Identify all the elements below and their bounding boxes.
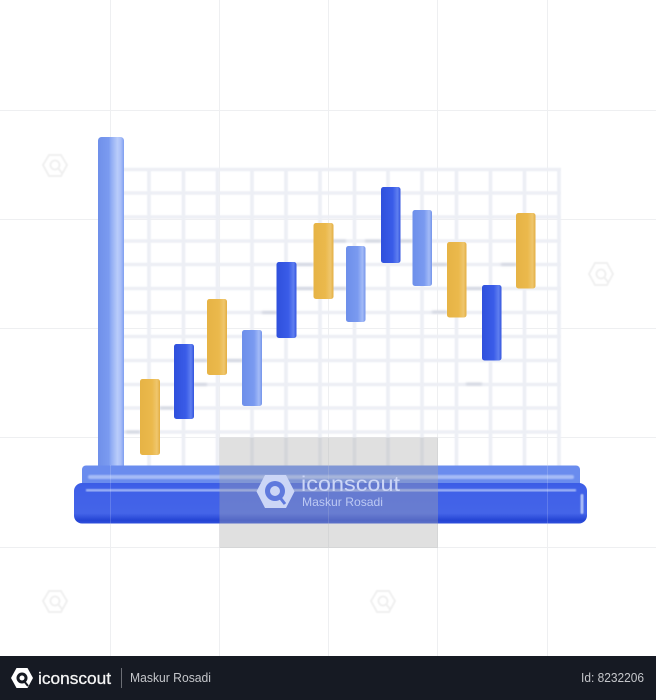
bar 11 dark blue xyxy=(482,285,502,360)
bar shadows on grid xyxy=(126,241,516,432)
horizontal grid lines xyxy=(122,170,561,432)
faint watermark icon bottom center xyxy=(371,591,395,612)
bar 8 dark blue xyxy=(381,187,400,263)
watermark lines over base xyxy=(110,465,548,524)
base upper tier xyxy=(82,466,580,490)
faint watermark icon bottom left xyxy=(43,591,67,612)
footer brand text: iconscout xyxy=(38,669,111,688)
bar 4 light blue xyxy=(242,330,262,406)
base lower tier xyxy=(74,483,587,524)
bar 9 light blue xyxy=(412,210,432,286)
bar 6 gold xyxy=(314,223,334,299)
faint watermark icon right xyxy=(589,263,613,285)
center watermark panel xyxy=(220,438,438,548)
footer id: Id: 8232206 xyxy=(581,671,644,685)
footer bar xyxy=(0,656,656,700)
bar 7 light blue xyxy=(346,246,366,322)
bar 12 gold xyxy=(516,213,536,288)
bar 10 gold xyxy=(447,242,466,318)
vertical axis column xyxy=(98,137,124,472)
bar 5 dark blue xyxy=(276,262,296,338)
candlestick bars xyxy=(140,187,536,455)
faint watermark icon top left xyxy=(43,155,67,176)
bar 2 dark blue xyxy=(174,344,194,419)
watermark logo xyxy=(256,475,294,508)
bar 1 gold xyxy=(140,379,160,455)
bar 3 gold xyxy=(207,299,227,375)
watermark brand text: iconscout xyxy=(301,473,400,496)
vertical grid lines xyxy=(149,168,559,467)
footer logo icon xyxy=(11,668,33,688)
chart grid xyxy=(122,168,561,467)
footer author: Maskur Rosadi xyxy=(130,671,211,685)
footer divider xyxy=(121,668,122,688)
watermark author text: Maskur Rosadi xyxy=(302,495,383,509)
